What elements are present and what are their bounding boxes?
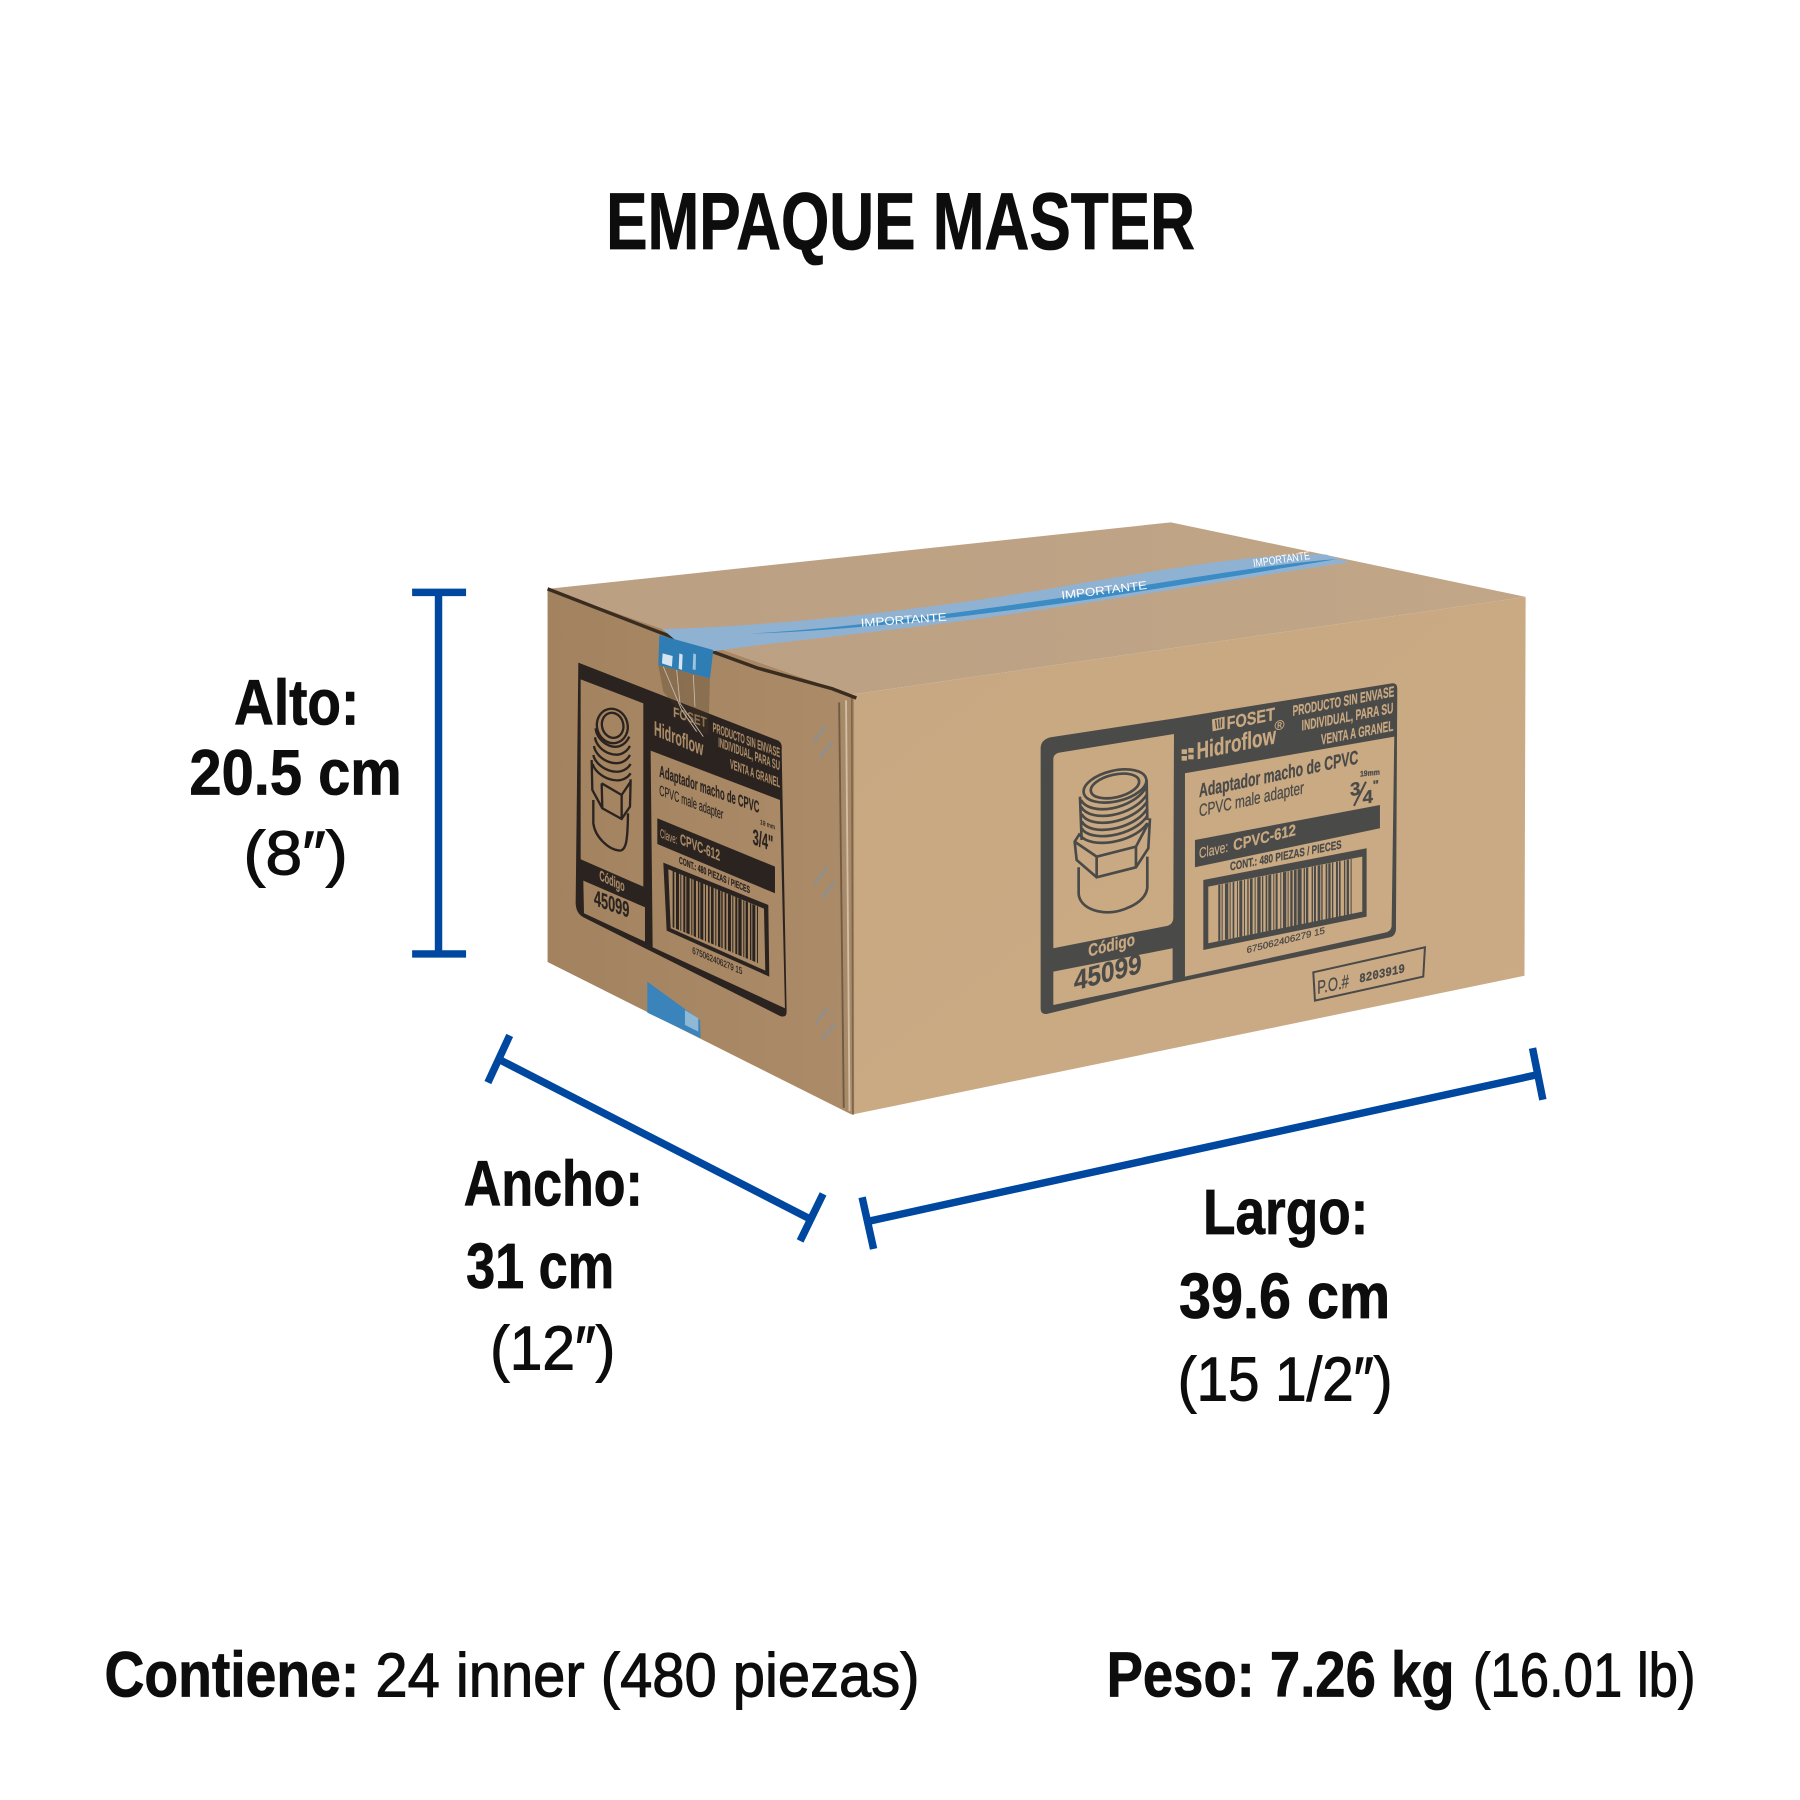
weight text: Peso: 7.26 kg bbox=[1107, 1639, 1454, 1711]
label texts bbox=[594, 705, 780, 977]
label texts: CPVC-612 bbox=[680, 832, 720, 865]
contents text bbox=[104, 1639, 920, 1711]
left face printed label: VENTA A GRANEL bbox=[730, 756, 780, 790]
label texts: Clave: bbox=[1199, 840, 1228, 862]
label texts: 675062406279 15 bbox=[1247, 925, 1325, 956]
label texts: 45099 bbox=[594, 885, 629, 923]
weight text: (16.01 lb) bbox=[1473, 1642, 1696, 1711]
label texts: 45099 bbox=[1074, 948, 1142, 997]
Hidroflow logo bbox=[1182, 723, 1276, 765]
label texts bbox=[1074, 684, 1394, 997]
FOSET logo: FOSET bbox=[1227, 704, 1275, 733]
label texts: PRODUCTO SIN ENVASE bbox=[1293, 684, 1394, 720]
label texts: Código bbox=[599, 868, 625, 896]
label texts: CONT.: 480 PIEZAS / PIECES bbox=[1230, 837, 1342, 874]
label texts: INDIVIDUAL, PARA SU bbox=[1302, 701, 1393, 735]
length label: 39.6 cm bbox=[1179, 1260, 1390, 1332]
flap edge bbox=[548, 589, 856, 698]
length dimension line bbox=[862, 1048, 1543, 1249]
cardboard box bbox=[548, 522, 1526, 1115]
box top face bbox=[548, 522, 1526, 695]
P.O. number box: 8203919 bbox=[1359, 961, 1405, 987]
fraction three quarters: 4 bbox=[1363, 786, 1374, 808]
top blue tape on left face bbox=[658, 635, 713, 694]
label texts: CPVC male adapter bbox=[659, 782, 723, 823]
left face printed label: PRODUCTO SIN ENVASE bbox=[713, 719, 780, 760]
height label: (8″) bbox=[243, 820, 348, 889]
length label bbox=[1178, 1176, 1392, 1415]
fraction three quarters: " bbox=[1373, 777, 1379, 793]
box left face bbox=[548, 589, 852, 1115]
fitting drawing bbox=[592, 705, 632, 851]
barcode bbox=[663, 863, 769, 977]
P.O. number box: P.O.# bbox=[1317, 970, 1349, 998]
label texts: 19 mm bbox=[760, 819, 775, 831]
label texts: Clave: bbox=[660, 826, 677, 847]
clave band bbox=[1195, 805, 1380, 867]
packing tape on top bbox=[662, 550, 1349, 654]
left face printed label: INDIVIDUAL, PARA SU bbox=[718, 734, 780, 773]
label texts: FOSET bbox=[673, 705, 707, 731]
barcode bbox=[1203, 848, 1367, 950]
length label: (15 1/2″) bbox=[1178, 1346, 1392, 1415]
fraction three quarters: 3 bbox=[1350, 778, 1360, 800]
front face printed label bbox=[1041, 683, 1425, 1014]
label texts: Adaptador macho de CPVC bbox=[1199, 747, 1358, 802]
width label: Ancho: bbox=[464, 1147, 643, 1219]
label texts: 19mm bbox=[1360, 768, 1380, 779]
P.O. number box bbox=[1313, 947, 1425, 1001]
width label: (12″) bbox=[490, 1315, 615, 1384]
height dimension line bbox=[412, 592, 466, 954]
weight text bbox=[1107, 1639, 1696, 1711]
corner seam bbox=[837, 696, 854, 1115]
title: EMPAQUE MASTER bbox=[606, 177, 1195, 267]
label texts: VENTA A GRANEL bbox=[1321, 719, 1393, 749]
length label: Largo: bbox=[1203, 1176, 1368, 1248]
label texts: Hidroflow bbox=[654, 716, 703, 761]
packing tape on top: IMPORTANTE bbox=[860, 612, 947, 630]
label texts: CPVC male adapter bbox=[1199, 778, 1304, 821]
bottom blue tape on left face bbox=[647, 982, 701, 1038]
height label: 20.5 cm bbox=[189, 736, 402, 808]
width dimension line bbox=[488, 1035, 823, 1241]
width label bbox=[464, 1147, 643, 1384]
clave band bbox=[657, 818, 775, 893]
height label: Alto: bbox=[234, 666, 359, 738]
clear tape strip bbox=[658, 665, 710, 737]
label texts: CONT.: 480 PIEZAS / PIECES bbox=[679, 856, 750, 896]
fitting drawing bbox=[1075, 764, 1150, 912]
fraction three quarters bbox=[1350, 777, 1379, 808]
box front face bbox=[852, 597, 1526, 1115]
label dark background bbox=[576, 663, 787, 1017]
contents text: 24 inner (480 piezas) bbox=[375, 1642, 920, 1711]
packing tape on top: IMPORTANTE bbox=[1252, 550, 1311, 570]
FOSET logo: ® bbox=[1275, 717, 1285, 734]
contents text: Contiene: bbox=[104, 1639, 359, 1711]
Hidroflow logo: Hidroflow bbox=[1197, 723, 1276, 765]
label texts: Código bbox=[1088, 929, 1135, 961]
label texts: Adaptador macho de CPVC bbox=[659, 761, 759, 817]
width label: 31 cm bbox=[466, 1230, 614, 1302]
staples bbox=[814, 727, 834, 1038]
height label bbox=[189, 666, 402, 889]
left face printed label bbox=[576, 635, 834, 1038]
label dark background bbox=[1041, 683, 1397, 1014]
label texts: 675062406279 15 bbox=[692, 946, 742, 977]
label texts: 3/4" bbox=[753, 824, 773, 856]
label texts: CPVC-612 bbox=[1233, 821, 1296, 855]
packing tape on top: IMPORTANTE bbox=[1061, 580, 1148, 602]
